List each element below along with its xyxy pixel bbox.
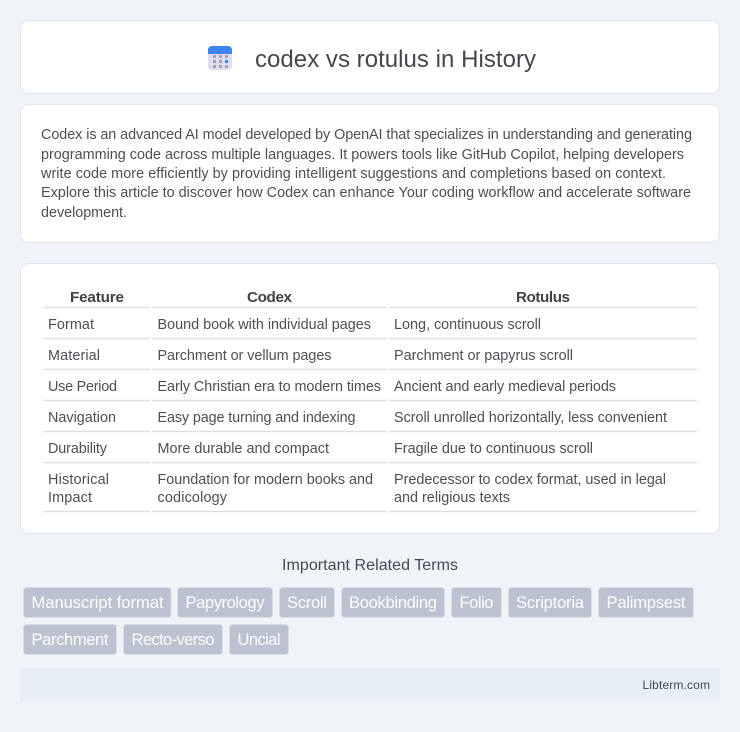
- row: format: [48, 317, 541, 333]
- tag: Recto-verso: Recto-verso: [132, 630, 214, 649]
- tag: Uncial: Uncial: [238, 630, 280, 649]
- row: historical impact: Predecessor to codex format, used in legal: [394, 472, 666, 488]
- row: material: Material: [48, 348, 100, 364]
- table header: [70, 289, 570, 306]
- tag: Parchment: [24, 624, 116, 654]
- row: use period: Early Christian era to modern times: [158, 379, 381, 395]
- description text: write code more efficiently by providing intelligent suggestions and completions based on context.: [40, 166, 666, 182]
- tag: Scriptoria: [508, 588, 592, 618]
- row: durability: Fragile due to continuous scroll: [394, 441, 593, 457]
- tag list: [24, 588, 694, 654]
- heading: related terms: Important Related Terms: [282, 557, 458, 574]
- row: durability: More durable and compact: [158, 441, 329, 457]
- table header: Codex: [247, 289, 293, 306]
- tag: Palimpsest: Palimpsest: [606, 593, 686, 612]
- row: navigation: Navigation: [48, 410, 116, 426]
- row: durability: [48, 441, 593, 457]
- row: durability: Durability: [48, 441, 108, 457]
- tag: Manuscript format: Manuscript format: [32, 593, 164, 612]
- row: use period: Ancient and early medieval periods: [394, 379, 616, 395]
- row: historical impact: [48, 472, 666, 506]
- footer: [20, 668, 720, 702]
- panel: description: [20, 104, 720, 242]
- description text: Codex is an advanced AI model developed by OpenAI that specializes in understanding and generating: [41, 127, 692, 143]
- row: navigation: Easy page turning and indexing: [158, 410, 356, 426]
- row: use period: [48, 379, 616, 395]
- description text: programming code across multiple languages. It powers tools like GitHub Copilot, helping developers: [41, 147, 684, 163]
- row: format: Long, continuous scroll: [394, 317, 541, 333]
- tag: Palimpsest: [598, 588, 694, 618]
- row: material: Parchment or vellum pages: [158, 348, 332, 364]
- tag: Folio: Folio: [460, 593, 494, 612]
- row: historical impact: Historical: [48, 472, 109, 488]
- tag: Folio: [452, 588, 502, 618]
- tag: Parchment: Parchment: [32, 630, 109, 649]
- row: format: Format: [48, 317, 94, 333]
- tag: Manuscript format: [24, 588, 171, 618]
- tag: Papyrology: Papyrology: [186, 593, 265, 612]
- tag: Papyrology: [178, 588, 272, 618]
- footer credit: Libterm.com: [642, 678, 710, 692]
- row: navigation: Scroll unrolled horizontally, less convenient: [394, 410, 667, 426]
- tag: Scriptoria: Scriptoria: [516, 593, 585, 612]
- table header: Feature: [70, 289, 124, 306]
- row: historical impact: Impact: [48, 490, 92, 506]
- description text: [40, 127, 692, 221]
- title: codex vs rotulus in History: [255, 46, 536, 73]
- row: format: Bound book with individual pages: [158, 317, 371, 333]
- tag: Recto-verso: [124, 624, 222, 654]
- description text: development.: [41, 205, 127, 221]
- tag: Bookbinding: [342, 588, 444, 618]
- row: historical impact: codicology: [158, 490, 228, 506]
- row: historical impact: Foundation for modern books and: [158, 472, 373, 488]
- tag: Bookbinding: Bookbinding: [349, 593, 437, 612]
- panel: comparison table: [20, 264, 720, 534]
- panel: title card: [20, 20, 720, 94]
- description text: Explore this article to discover how Codex can enhance Your coding workflow and accelerate software: [41, 185, 691, 201]
- row: material: [48, 348, 573, 364]
- tag: Uncial: [230, 624, 288, 654]
- row: use period: Use Period: [48, 379, 117, 395]
- row: historical impact: and religious texts: [394, 490, 510, 506]
- row: material: Parchment or papyrus scroll: [394, 348, 573, 364]
- tag: Scroll: Scroll: [287, 593, 327, 612]
- tag: Scroll: [280, 588, 334, 618]
- row: navigation: [48, 410, 667, 426]
- table header: Rotulus: [516, 289, 570, 306]
- icon: calendar: [208, 46, 232, 70]
